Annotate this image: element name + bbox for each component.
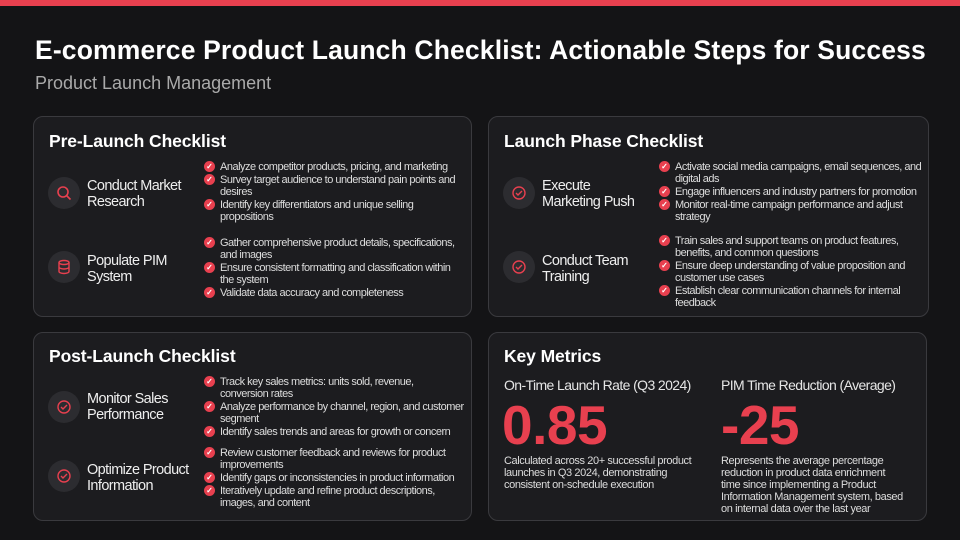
bullets: customer use cases: [675, 272, 764, 284]
label: Conduct Market: [87, 178, 181, 194]
label: Populate PIM: [87, 253, 167, 269]
metric: PIM time reduction: Information Management system, based: [721, 491, 903, 503]
metric: on-time launch rate: On-Time Launch Rate (Q3 2024): [504, 377, 691, 393]
label: Execute: [542, 178, 590, 194]
icon: check: [503, 177, 535, 209]
icon: check: [48, 391, 80, 423]
bullets: feedback: [675, 297, 716, 309]
panel: post-launch: [33, 332, 472, 521]
bullets: Review customer feedback and reviews for product: [220, 447, 445, 459]
label: Monitor Sales: [87, 391, 168, 407]
bullets: [204, 237, 455, 299]
label: [87, 253, 167, 285]
heading: post-launch: Post-Launch Checklist: [49, 346, 236, 366]
label: [87, 462, 190, 494]
bullets: Analyze competitor products, pricing, and marketing: [220, 161, 448, 173]
label: Information: [87, 478, 153, 494]
icon: check: [503, 251, 535, 283]
metric: PIM time reduction: PIM Time Reduction (Average): [721, 377, 895, 393]
row: market research: [48, 161, 455, 223]
icon: check: [48, 460, 80, 492]
bullets: segment: [220, 413, 259, 425]
bullets: Validate data accuracy and completeness: [220, 287, 403, 299]
bullets: Establish clear communication channels for internal: [675, 285, 900, 297]
bullets: Identify key differentiators and unique selling: [220, 199, 413, 211]
label: [87, 178, 182, 210]
row: PIM: [48, 237, 455, 299]
bullets: desires: [220, 186, 252, 198]
heading: pre-launch: Pre-Launch Checklist: [49, 131, 226, 151]
icon: search: [48, 177, 80, 209]
row: optimize info: [48, 447, 454, 509]
metric: PIM time reduction: -25: [721, 394, 799, 456]
subtitle: Product Launch Management: [35, 73, 271, 93]
label: Marketing Push: [542, 194, 634, 210]
bullets: strategy: [675, 211, 710, 223]
bullets: [659, 235, 905, 309]
label: [542, 178, 634, 210]
bullets: Ensure consistent formatting and classification within: [220, 262, 450, 274]
bullets: Gather comprehensive product details, specifications,: [220, 237, 455, 249]
metric: PIM time reduction: on internal data over the last year: [721, 503, 870, 515]
metric: on-time launch rate: 0.85: [502, 394, 607, 456]
panel: key metrics: [488, 332, 927, 521]
bullets: improvements: [220, 459, 283, 471]
label: [87, 391, 168, 423]
bullets: [204, 447, 454, 509]
heading: launch: Launch Phase Checklist: [504, 131, 703, 151]
label: System: [87, 269, 132, 285]
bullets: conversion rates: [220, 388, 293, 400]
bullets: and images: [220, 249, 272, 261]
bullets: Iteratively update and refine product descriptions,: [220, 485, 435, 497]
bullets: images, and content: [220, 497, 310, 509]
heading: key metrics: Key Metrics: [504, 346, 601, 366]
metric: on-time launch rate: consistent on-schedule execution: [504, 479, 654, 491]
bullets: benefits, and common questions: [675, 247, 818, 259]
bullets: Identify gaps or inconsistencies in product information: [220, 472, 454, 484]
bullets: digital ads: [675, 173, 719, 185]
bullets: the system: [220, 274, 268, 286]
bullets: Track key sales metrics: units sold, revenue,: [220, 376, 414, 388]
metric: on-time launch rate: [502, 377, 692, 491]
metric: on-time launch rate: launches in Q3 2024, demonstrating: [504, 467, 667, 479]
bullets: Activate social media campaigns, email sequences, and: [675, 161, 921, 173]
row: marketing push: [503, 161, 921, 223]
bullets: propositions: [220, 211, 273, 223]
label: [542, 253, 628, 285]
label: Research: [87, 194, 144, 210]
bullets: Ensure deep understanding of value proposition and: [675, 260, 905, 272]
panel: pre-launch: [33, 116, 472, 317]
bullets: Identify sales trends and areas for growth or concern: [220, 426, 450, 438]
label: Optimize Product: [87, 462, 189, 478]
metric: PIM time reduction: reduction in product data enrichment: [721, 467, 885, 479]
label: Performance: [87, 407, 163, 423]
bullets: Monitor real-time campaign performance and adjust: [675, 199, 902, 211]
bullets: [204, 376, 464, 438]
title: E-commerce Product Launch Checklist: Actionable Steps for Success: [35, 35, 926, 65]
bullets: Analyze performance by channel, region, and customer: [220, 401, 464, 413]
bullets: Engage influencers and industry partners for promotion: [675, 186, 916, 198]
metric: PIM time reduction: [721, 377, 903, 515]
bullets: [204, 161, 455, 223]
icon: database: [48, 251, 80, 283]
label: Training: [542, 269, 589, 285]
bullets: [659, 161, 921, 223]
row: team training: [503, 235, 905, 309]
label: Conduct Team: [542, 253, 628, 269]
row: sales performance: [48, 376, 464, 438]
metric: on-time launch rate: Calculated across 20+ successful product: [504, 455, 691, 467]
metric: PIM time reduction: Represents the average percentage: [721, 455, 883, 467]
panel: launch phase: [488, 116, 929, 317]
bullets: Train sales and support teams on product features,: [675, 235, 898, 247]
metric: PIM time reduction: time since implementing a Product: [721, 479, 876, 491]
bullets: Survey target audience to understand pain points and: [220, 174, 455, 186]
